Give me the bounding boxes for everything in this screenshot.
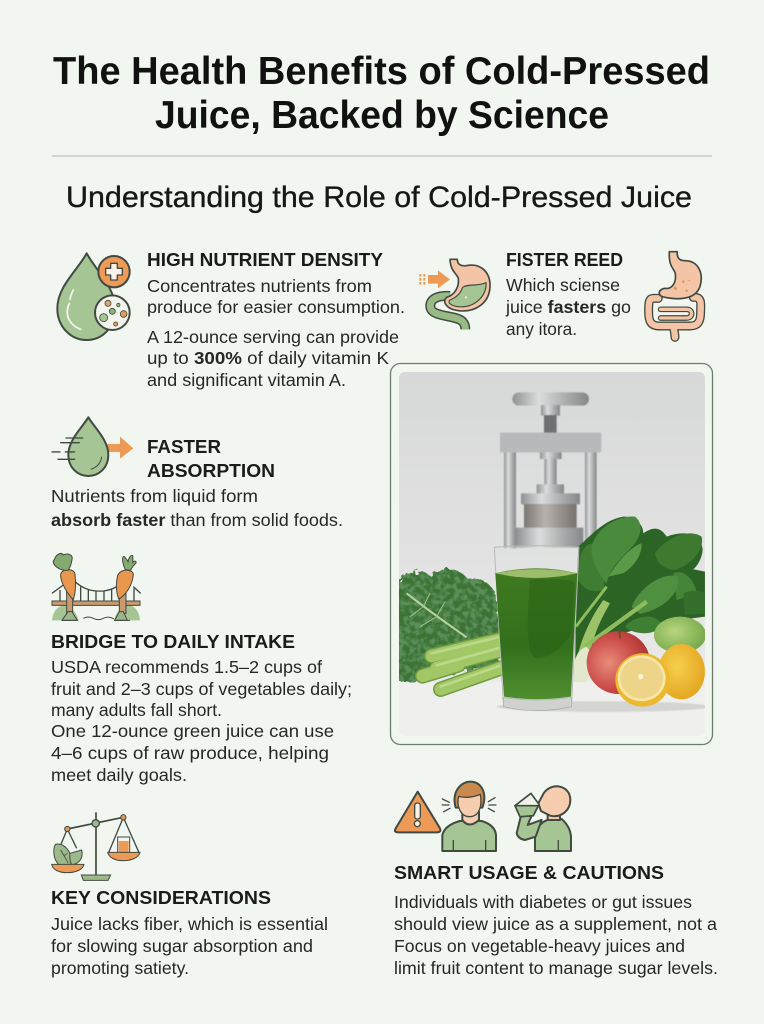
- text block: bridge to daily intake: meet daily goals.: [51, 765, 187, 785]
- person with alert lines: [442, 782, 496, 851]
- text block: bridge to daily intake: 4–6 cups of raw produce, helping: [51, 743, 329, 763]
- icon: nutrient drop: [57, 253, 130, 340]
- title: Juice, Backed by Science: [155, 94, 609, 137]
- text block: smart usage and cautions: Individuals with diabetes or gut issues: [394, 892, 692, 912]
- text block: bridge to daily intake: fruit and 2–3 cups of vegetables daily;: [51, 679, 352, 699]
- text block: key considerations: [51, 888, 328, 978]
- text block: faster absorption: Nutrients from liquid form: [51, 486, 258, 506]
- text block: high nutrient density: Concentrates nutrients from: [147, 276, 372, 296]
- icon: warning and person: [395, 782, 571, 851]
- icon: fast absorption drop: [52, 417, 133, 476]
- text block: fister reed: [505, 250, 631, 339]
- text block: bridge to daily intake: many adults fall short.: [51, 700, 222, 720]
- text block: faster absorption: [51, 437, 343, 530]
- text block: smart usage and cautions: limit fruit content to manage sugar levels.: [394, 958, 718, 978]
- text block: smart usage and cautions: should view juice as a supplement, not a: [394, 914, 717, 934]
- celery: [423, 637, 500, 689]
- text block: key considerations: promoting satiety.: [51, 958, 189, 978]
- warning triangle: [395, 792, 440, 832]
- text block: smart usage and cautions: Focus on vegetable-heavy juices and: [394, 936, 685, 956]
- person drinking: [515, 786, 571, 851]
- text block: fister reed: Which sciense: [506, 275, 620, 295]
- kale: [391, 570, 501, 681]
- text block: fister reed: juice fasters go: [505, 297, 631, 317]
- text block: bridge to daily intake: One 12-ounce green juice can use: [51, 721, 334, 741]
- glass of green juice: [494, 546, 579, 711]
- yellow lemon: [658, 644, 705, 699]
- text block: smart usage and cautions: SMART USAGE & CAUTIONS: [394, 863, 664, 883]
- icon: stomach and intestines: [649, 252, 701, 337]
- icon: carrot bridge: [52, 554, 141, 620]
- icon: digestive arrow: [419, 259, 490, 329]
- lemon half: [615, 653, 670, 707]
- spinach: [573, 516, 705, 683]
- text block: high nutrient density: up to 300% of daily vitamin K: [147, 348, 389, 368]
- juice press: [500, 392, 601, 548]
- text block: faster absorption: FASTER: [147, 437, 221, 457]
- photo: [399, 372, 705, 713]
- text block: faster absorption: absorb faster than from solid foods.: [51, 510, 343, 530]
- title: The Health Benefits of Cold-Pressed: [53, 50, 710, 93]
- text block: key considerations: Juice lacks fiber, which is essential: [51, 914, 328, 934]
- photo frame: cold press, juice and produce: [390, 364, 712, 744]
- text block: bridge to daily intake: BRIDGE TO DAILY INTAKE: [51, 632, 295, 652]
- text block: bridge to daily intake: [51, 632, 352, 785]
- text block: high nutrient density: HIGH NUTRIENT DENSITY: [147, 250, 383, 270]
- text block: key considerations: for slowing sugar absorption and: [51, 936, 313, 956]
- text block: smart usage and cautions: [394, 863, 718, 978]
- text block: high nutrient density: produce for easier consumption.: [147, 297, 405, 317]
- text block: fister reed: FISTER REED: [506, 250, 623, 270]
- text block: faster absorption: ABSORPTION: [147, 461, 275, 481]
- section heading: Understanding the Role of Cold-Pressed Juice: [66, 181, 692, 214]
- text block: high nutrient density: A 12-ounce serving can provide: [147, 327, 399, 347]
- text block: key considerations: KEY CONSIDERATIONS: [51, 888, 271, 908]
- green apple: [654, 617, 706, 653]
- text block: high nutrient density: [147, 250, 405, 390]
- red apple: [587, 629, 650, 694]
- icon: balance scale: [52, 812, 140, 880]
- text block: bridge to daily intake: USDA recommends 1.5–2 cups of: [51, 657, 322, 677]
- text block: fister reed: any itora.: [506, 319, 577, 339]
- title: [53, 50, 710, 137]
- text block: high nutrient density: and significant vitamin A.: [147, 370, 346, 390]
